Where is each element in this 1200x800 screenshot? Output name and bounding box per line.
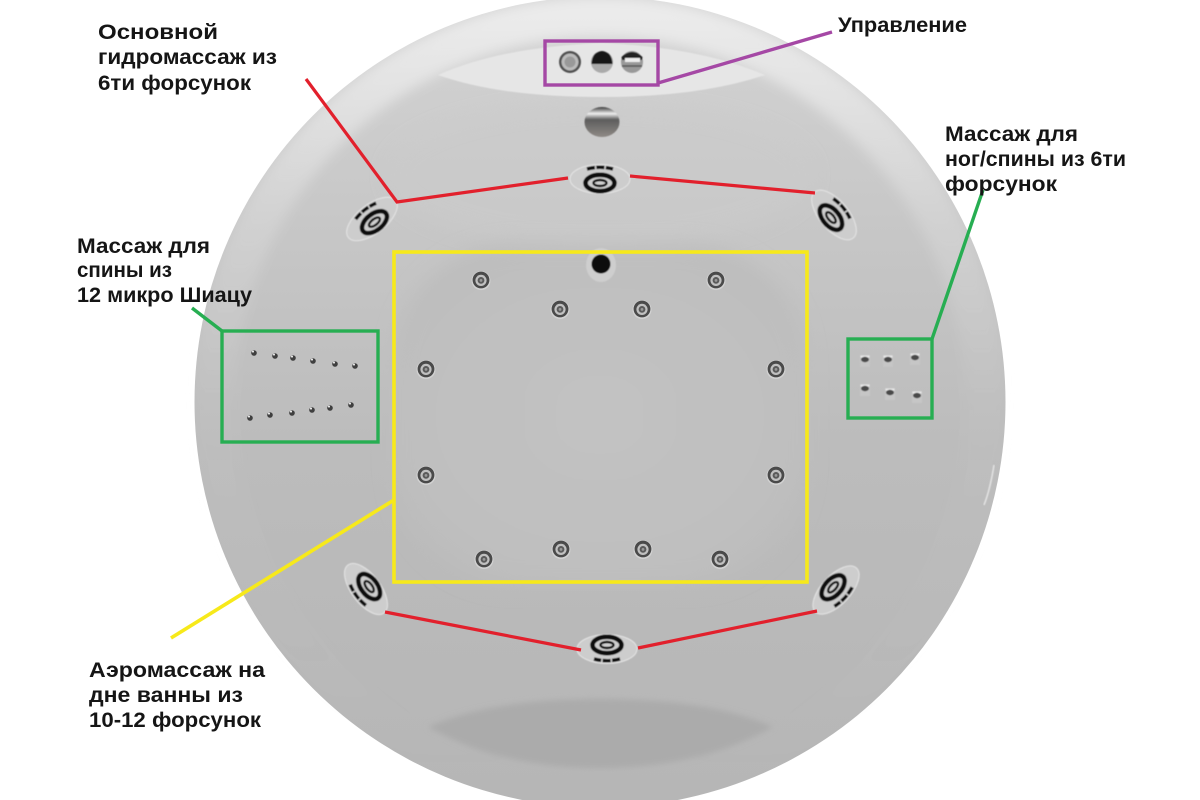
seat shadow at bottom of tub bbox=[428, 699, 773, 768]
label: legs and back massage: ног/спины из 6ти bbox=[945, 148, 1126, 171]
micro shiatsu jets bbox=[247, 350, 358, 421]
label: legs and back massage: форсунок bbox=[945, 173, 1058, 196]
label: aeromassage: Аэромассаж на bbox=[89, 659, 265, 682]
label: main hydromassage: Основной bbox=[98, 21, 218, 44]
icon: chrome overflow bbox=[584, 107, 620, 137]
red leader lines: main jets bbox=[306, 79, 817, 650]
label: controls: Управление bbox=[838, 14, 967, 37]
aeromassage floor jets bbox=[416, 271, 786, 569]
icon: control knobs bbox=[559, 51, 643, 73]
label: back massage shiatsu: спины из bbox=[77, 259, 172, 282]
label: aeromassage: 10-12 форсунок bbox=[89, 709, 262, 732]
yellow zone: aeromassage bbox=[171, 252, 807, 638]
green zone: shiatsu bbox=[192, 308, 378, 442]
icon: black drain bbox=[586, 248, 616, 282]
green zone: legs and back bbox=[848, 190, 983, 418]
label: aeromassage: дне ванны из bbox=[89, 684, 243, 707]
label: back massage shiatsu: Массаж для bbox=[77, 235, 210, 258]
bathtub body bbox=[194, 0, 1006, 800]
label: back massage shiatsu: 12 микро Шиацу bbox=[77, 284, 252, 307]
label: main hydromassage: 6ти форсунок bbox=[98, 72, 252, 95]
main hydromassage jets bbox=[336, 164, 867, 664]
leg and back massage jets bbox=[860, 353, 922, 403]
label: legs and back massage: Массаж для bbox=[945, 123, 1078, 146]
rim highlight on right edge bbox=[984, 465, 994, 505]
control panel surface bbox=[438, 43, 765, 97]
basin floor bbox=[395, 245, 805, 585]
purple zone: controls bbox=[545, 32, 832, 85]
label: main hydromassage: гидромассаж из bbox=[98, 46, 277, 69]
